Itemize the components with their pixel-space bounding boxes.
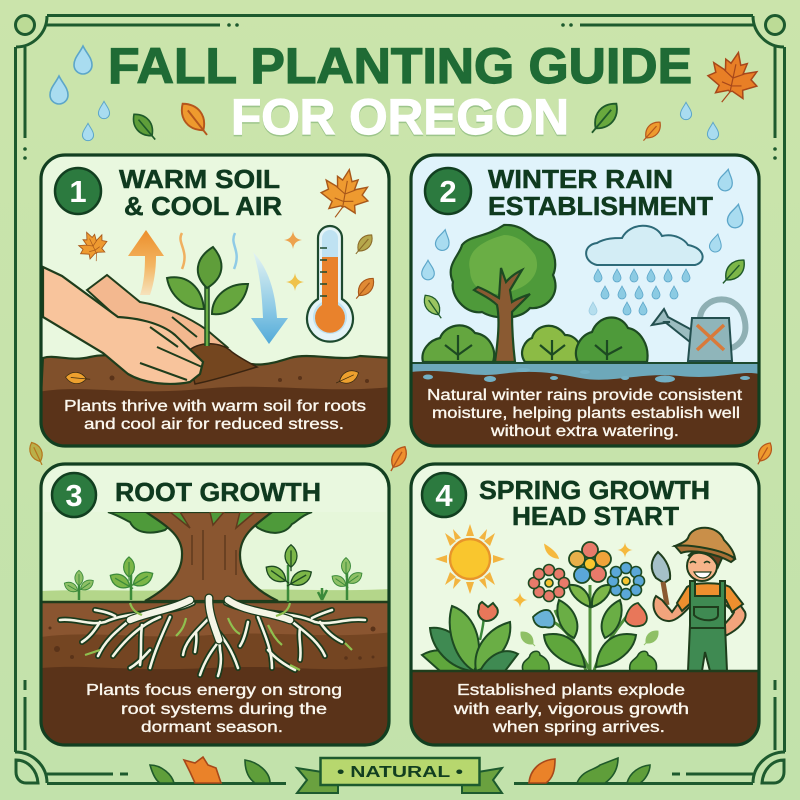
icons: top raindrops (50, 46, 719, 141)
rain cloud (586, 226, 703, 265)
badge 1: 1 (69, 174, 87, 209)
front hand (43, 267, 203, 384)
small bushes (520, 630, 658, 670)
grass band (42, 589, 388, 601)
ribbon banner (297, 758, 502, 793)
ribbon banner: • NATURAL • (337, 764, 464, 781)
roots (60, 598, 365, 676)
panel 4 text: Established plants explode (457, 682, 685, 699)
title: FALL PLANTING GUIDE (108, 38, 692, 94)
ground (411, 671, 759, 751)
panel 3 illustration (41, 512, 392, 752)
panel 4 text: when spring arrives. (492, 719, 665, 736)
panel 4: spring growth head start (411, 464, 759, 751)
panel 2 heading (488, 164, 713, 221)
trowel (652, 552, 670, 583)
panel 4 heading (479, 475, 710, 531)
panel 1 text: Plants thrive with warm soil for roots (64, 398, 366, 415)
panel 2 text: moisture, helping plants establish well (432, 405, 740, 422)
top flower (569, 542, 611, 583)
sun (435, 524, 505, 594)
panel 3 title strip (44, 467, 386, 512)
water and soil (412, 364, 758, 380)
panel 2 text: Natural winter rains provide consistent (427, 387, 743, 404)
panel 2 heading: ESTABLISHMENT (488, 191, 713, 221)
panel 1: warm soil and cool air (38, 155, 392, 450)
shirt (677, 583, 743, 612)
soil (42, 354, 388, 392)
badge 2: 2 (439, 174, 457, 209)
side leaves (424, 259, 745, 319)
panel 2 heading: WINTER RAIN (488, 164, 673, 194)
panel 1 text: and cool air for reduced stress. (84, 416, 344, 433)
heat and cool waves (180, 233, 237, 269)
central flowering plant (528, 542, 647, 671)
maple leaf (320, 168, 370, 218)
tree canopy (108, 512, 312, 533)
badge 3: 3 (65, 478, 83, 513)
thermometer (307, 226, 353, 342)
arms (653, 590, 696, 621)
back hand (87, 275, 227, 352)
panel 1 illustration (38, 166, 392, 450)
red daisy (528, 564, 570, 602)
panel 3 text (86, 682, 342, 736)
panel 2 illustration (411, 168, 759, 450)
panel 3 text: dormant season. (141, 719, 283, 736)
panel 4 illustration (411, 524, 759, 751)
badge 4: 4 (435, 478, 453, 513)
blue daisy (608, 562, 644, 600)
title: FOR OREGON (231, 90, 569, 146)
rain drops (589, 269, 690, 315)
bottom leaves (150, 757, 650, 783)
panel 2: winter rain establishment (411, 155, 759, 450)
soil mound (187, 344, 257, 384)
overalls (688, 581, 727, 671)
panel 1 heading: & COOL AIR (124, 191, 282, 221)
left plant (422, 602, 518, 671)
panel 1 heading (119, 164, 282, 221)
sparkles and petal (512, 542, 633, 608)
panel 3 heading: ROOT GROWTH (115, 477, 321, 507)
sapling (167, 247, 248, 346)
panel 2 text: without extra watering. (490, 423, 679, 440)
panel 4 heading: SPRING GROWTH (479, 475, 710, 505)
title (108, 38, 692, 146)
panel 1 text (64, 398, 366, 433)
hat (675, 528, 735, 558)
soil layers (42, 603, 388, 637)
tulips (533, 610, 554, 628)
badge 4 (422, 473, 466, 517)
panel 4 text (453, 682, 689, 736)
up arrow (128, 230, 164, 295)
panel 2 text (427, 387, 743, 440)
panel 3: root growth (41, 464, 392, 752)
small leaves (78, 231, 374, 299)
badge 3 (52, 473, 96, 517)
panel 4 heading: HEAD START (512, 501, 679, 531)
face (687, 551, 717, 581)
gardener (652, 528, 746, 671)
title: FOR OREGON (231, 89, 569, 145)
panel 4 text: with early, vigorous growth (453, 701, 689, 718)
icons: top leaves (26, 47, 775, 474)
badge 2 (425, 168, 471, 214)
shrubs (422, 317, 648, 362)
tree (451, 225, 556, 362)
sparkles (284, 231, 304, 291)
badge 1 (55, 168, 101, 214)
down arrow (251, 252, 288, 344)
scattered drops (422, 168, 746, 280)
panel 1 heading: WARM SOIL (119, 164, 280, 194)
panel 3 text: Plants focus energy on strong (86, 682, 342, 699)
panel 3 text: root systems during the (121, 701, 327, 718)
seedlings (62, 545, 364, 602)
watering can (652, 299, 745, 361)
tree trunk (145, 512, 278, 601)
